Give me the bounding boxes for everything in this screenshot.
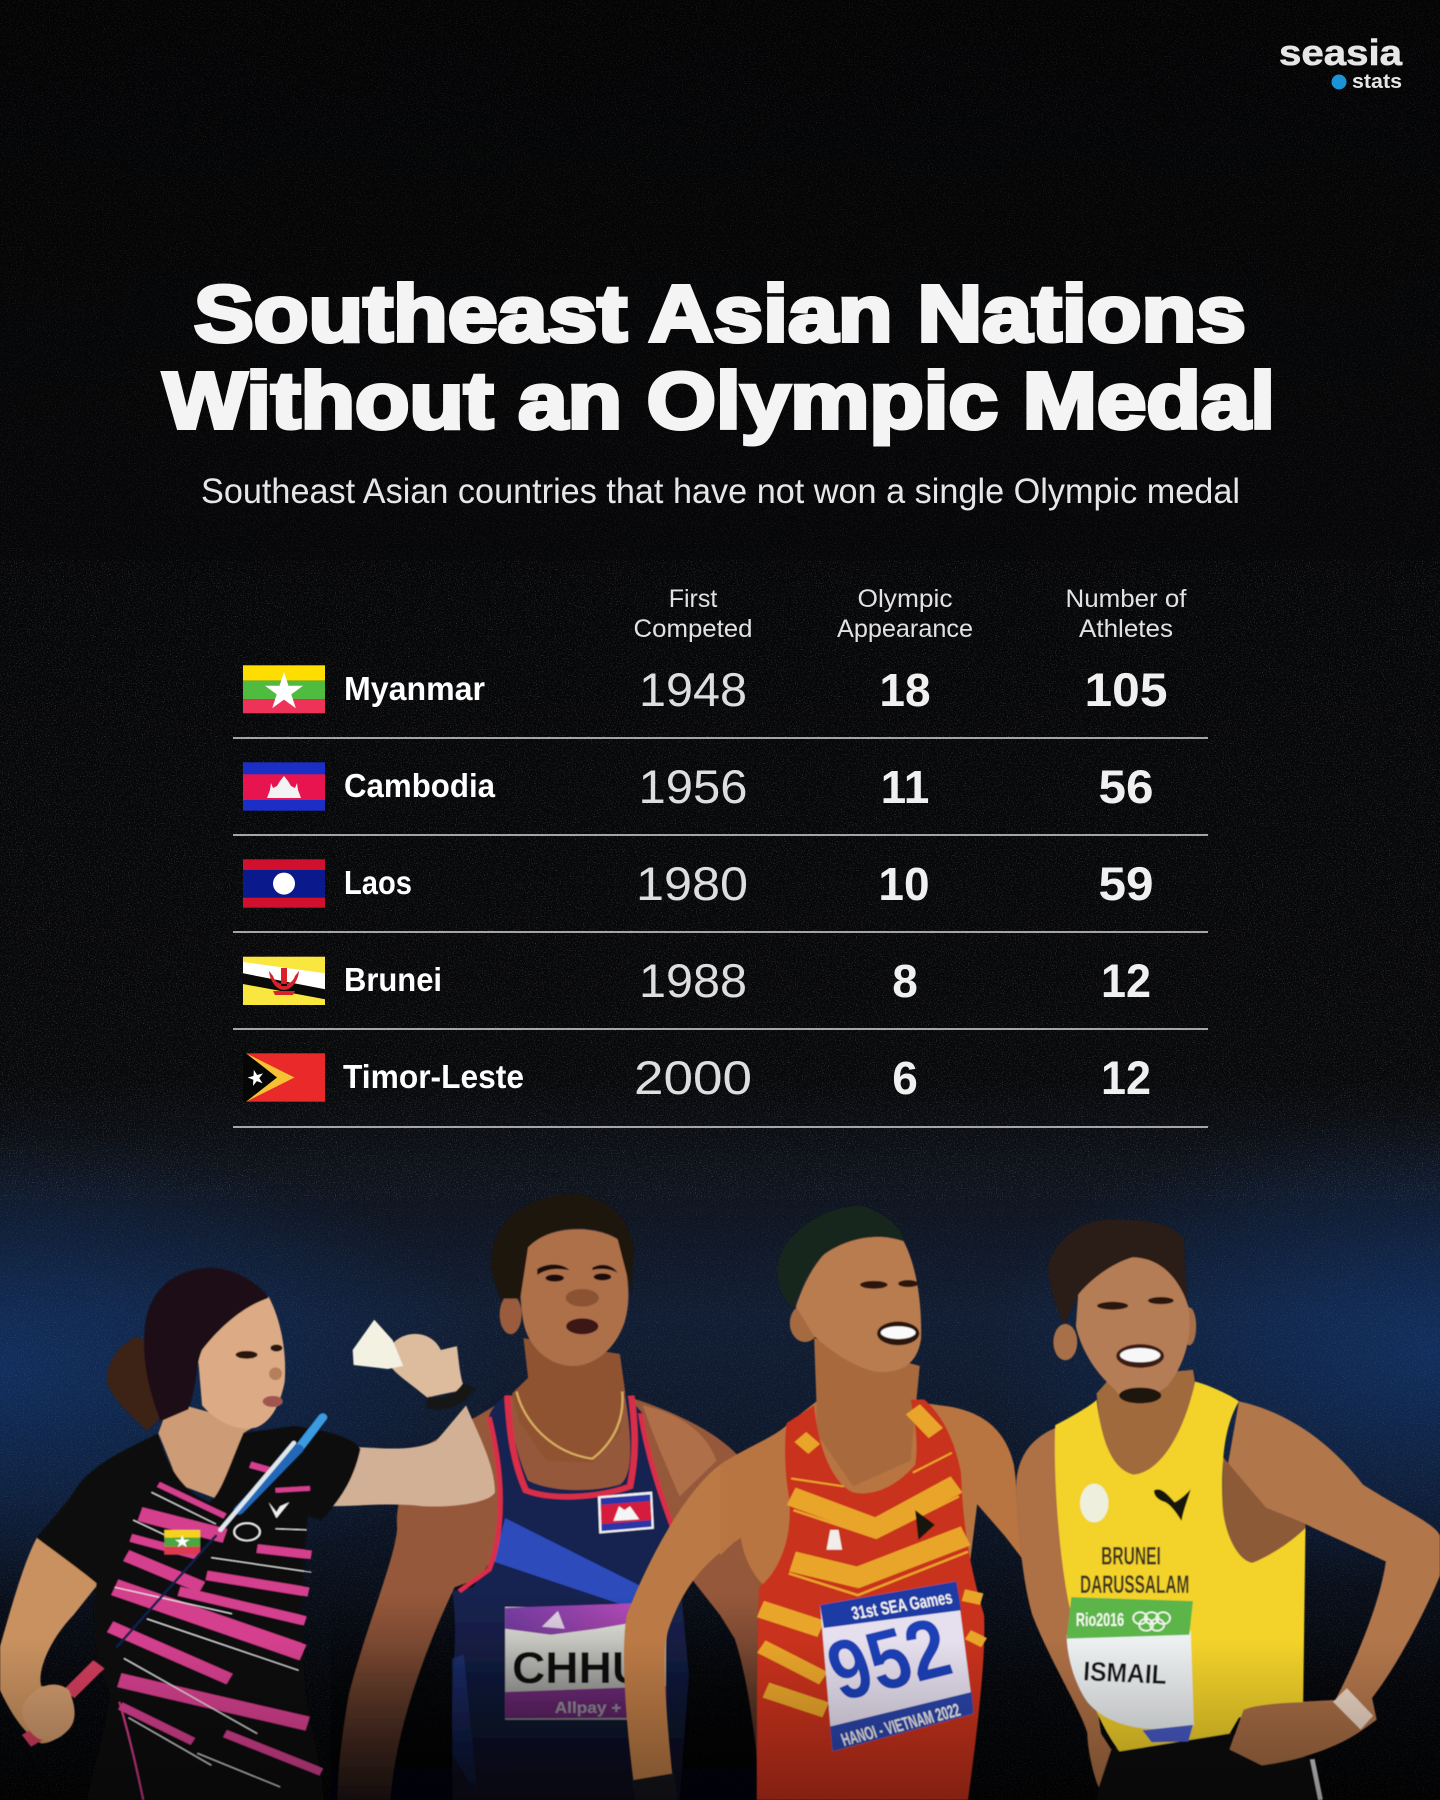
face: [197, 1297, 285, 1429]
shoulders and chest skin: [720, 1401, 1023, 1587]
shirt logos: [234, 1502, 289, 1541]
table: [233, 585, 1208, 1127]
flag: Cambodia: [243, 762, 325, 811]
column headers: Athletes: [1079, 615, 1173, 643]
athlete: Timor-Leste runner: [624, 1206, 1023, 1800]
row: Myanmar: 105: [1084, 663, 1168, 716]
row: Cambodia: 1956: [638, 760, 748, 813]
right arm: [1225, 1401, 1440, 1765]
flag: Laos: [243, 859, 325, 908]
facial features: [537, 1264, 618, 1334]
racket: [117, 1417, 323, 1647]
title: Without an Olympic Medal: [163, 356, 1275, 445]
singlet: [757, 1399, 984, 1800]
face: [1076, 1257, 1190, 1400]
lower body shadow: [331, 1595, 785, 1800]
row dividers: [233, 738, 1208, 1127]
row: Laos: Laos: [344, 864, 412, 901]
singlet: [1055, 1382, 1305, 1751]
row: Myanmar: Myanmar: [344, 670, 485, 707]
hair: [144, 1268, 269, 1421]
row: Myanmar: 18: [879, 664, 931, 716]
row: Timor-Leste: [243, 1051, 1151, 1104]
chest emblem: [915, 1510, 935, 1540]
wristband: [1333, 1688, 1373, 1730]
neck: [512, 1338, 625, 1463]
row: Cambodia: 11: [881, 761, 929, 813]
flag: Timor-Leste: [243, 1053, 325, 1102]
crest: [827, 1530, 842, 1550]
shirt pinstripes: [115, 1492, 311, 1787]
ponytail: [107, 1336, 161, 1431]
underarm: [1223, 1457, 1305, 1563]
raised arm: [331, 1405, 495, 1507]
title: [163, 269, 1275, 445]
athlete: Cambodian runner: [331, 1194, 785, 1800]
athlete: Brunei sprinter: [1016, 1219, 1440, 1800]
facial features: [1097, 1297, 1174, 1403]
row: Laos: [243, 857, 1154, 910]
row: Cambodia: Cambodia: [344, 767, 496, 804]
column headers: First: [669, 585, 717, 613]
race bib: ISMAIL: [1067, 1597, 1194, 1742]
row: Brunei: 12: [1101, 954, 1151, 1007]
flag: Myanmar: [243, 665, 325, 713]
row: Myanmar: 1948: [639, 663, 747, 716]
row: Brunei: Brunei: [344, 961, 442, 998]
hair: [491, 1194, 634, 1299]
left arm: [0, 1538, 99, 1743]
race bib: 952: HANOI - VIETNAM 2022: [839, 1700, 963, 1751]
race bib: 952: 31st SEA Games: [850, 1588, 954, 1624]
shorts: [1097, 1734, 1322, 1800]
hair: [1048, 1219, 1187, 1324]
gripping hand: [22, 1684, 75, 1741]
watch: [631, 1773, 678, 1800]
athlete: Myanmar badminton player: [0, 1268, 495, 1800]
face: [520, 1229, 628, 1366]
logo: seasia stats: seasia: [1279, 32, 1403, 73]
raised hand: [390, 1334, 465, 1397]
skin: torso and arms: [338, 1395, 781, 1800]
jersey lettering: BRUNEI: [1101, 1542, 1161, 1570]
watch: [427, 1386, 469, 1404]
singlet: [452, 1394, 689, 1800]
row: Timor-Leste: 2000: [634, 1051, 752, 1104]
chest crest: [1080, 1484, 1108, 1522]
bottom fade: [0, 1640, 1440, 1800]
race bib: 952: 952: [816, 1600, 962, 1719]
column headers: [634, 585, 1187, 643]
ears: [1053, 1307, 1196, 1360]
logo: seasia stats: [1279, 32, 1403, 93]
row: Timor-Leste: 6: [892, 1052, 918, 1104]
race bib: ISMAIL: ISMAIL: [1082, 1657, 1168, 1690]
row: Laos: 10: [878, 858, 930, 910]
race bib: ISMAIL: Rio2016: [1076, 1610, 1124, 1631]
row: Laos: 1980: [636, 857, 748, 910]
row: Brunei: 1988: [639, 954, 747, 1007]
row: Brunei: 8: [892, 955, 918, 1007]
jersey lettering: DARUSSALAM: [1080, 1571, 1189, 1598]
row: Myanmar: [243, 663, 1168, 716]
jersey lettering: [1080, 1542, 1189, 1598]
row: Brunei: [243, 954, 1151, 1007]
shuttlecock: [353, 1320, 403, 1369]
title: Southeast Asian Nations: [194, 269, 1246, 358]
shirt stripes: [110, 1465, 321, 1800]
chest patch: Cambodian flag: [598, 1492, 654, 1533]
hand on hip: [1230, 1702, 1361, 1765]
row: Timor-Leste: 12: [1101, 1051, 1151, 1104]
facial features: [236, 1344, 283, 1407]
singlet stripes: [760, 1409, 984, 1710]
row: Cambodia: [243, 760, 1154, 813]
singlet trim: [459, 1395, 675, 1591]
race bib: CHHUN: Allpay +: [555, 1698, 621, 1717]
row: Laos: 59: [1098, 857, 1154, 910]
race bib: CHHUN: [505, 1602, 666, 1720]
subtitle: Southeast Asian countries that have not won a single Olympic medal: [201, 472, 1240, 511]
column headers: Appearance: [837, 615, 973, 643]
column headers: Competed: [634, 615, 752, 643]
neck: [814, 1338, 920, 1486]
gold chain: [517, 1392, 623, 1459]
face: [796, 1237, 921, 1372]
column headers: Number of: [1066, 585, 1187, 613]
neck: [1097, 1370, 1198, 1475]
shirt: [37, 1426, 360, 1800]
ear: [168, 1361, 195, 1394]
column headers: Olympic: [858, 585, 952, 613]
left arm: [624, 1465, 748, 1800]
facial features: [860, 1280, 919, 1345]
ear: [790, 1304, 820, 1342]
logo: seasia stats: stats: [1352, 71, 1402, 93]
flag: Brunei: [243, 957, 325, 1005]
neck: [158, 1401, 257, 1500]
hair: [777, 1206, 904, 1309]
shirt flag: Myanmar: [164, 1530, 200, 1554]
race bib: CHHUN: CHHU: [512, 1644, 645, 1693]
ear: [500, 1295, 522, 1334]
puma logo: [1154, 1489, 1191, 1521]
row: Timor-Leste: Timor-Leste: [343, 1058, 524, 1095]
row: Cambodia: 56: [1098, 760, 1154, 813]
left arm: [1016, 1427, 1111, 1787]
racket grip: [28, 1649, 115, 1743]
